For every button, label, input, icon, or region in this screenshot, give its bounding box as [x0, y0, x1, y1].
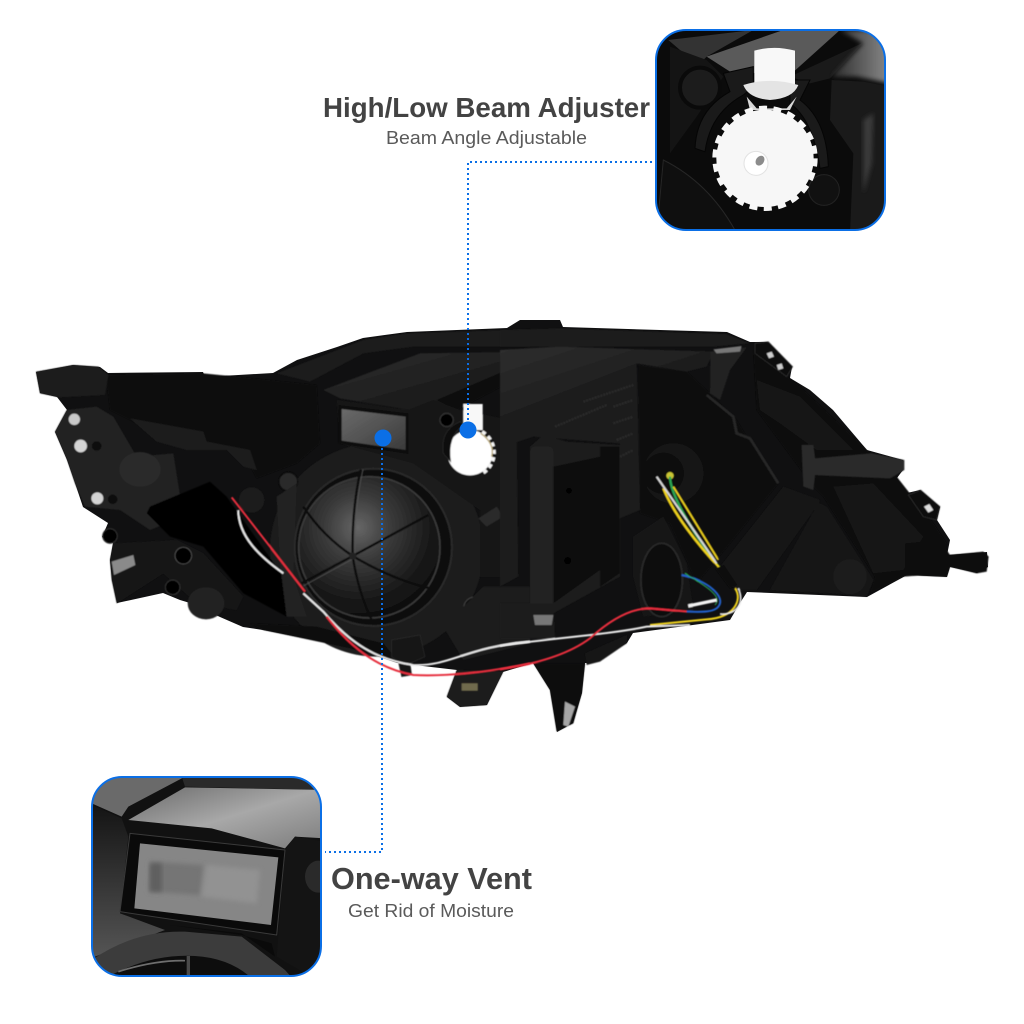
ridge [707, 395, 778, 483]
vent window [338, 405, 408, 454]
lower plug [188, 587, 224, 619]
clip arms [695, 67, 828, 168]
lens interior [833, 483, 923, 573]
tab 1 [755, 342, 793, 377]
round port [680, 68, 720, 108]
vent inner shade [161, 862, 202, 895]
label panel [500, 363, 640, 518]
vent frame [120, 833, 285, 935]
collar [743, 81, 798, 100]
wire sleeve [715, 565, 737, 588]
lower right housing [443, 587, 530, 660]
connector block [530, 435, 620, 613]
heading: beam adjuster: High/Low Beam Adjuster [323, 92, 650, 123]
screw 1 [69, 414, 80, 425]
round boss [833, 559, 867, 594]
post near bowl [279, 472, 298, 491]
top housing surface [323, 352, 530, 410]
upper wires [657, 477, 720, 568]
round plug [119, 452, 161, 487]
left bracket [55, 407, 183, 530]
vent housing block [337, 400, 510, 577]
top clip [710, 347, 747, 400]
vent inner light [203, 867, 258, 902]
panel: adjuster close-up [655, 29, 886, 231]
lamp housing silhouette [36, 320, 988, 732]
wire connector [392, 635, 425, 677]
ring hole c [103, 529, 117, 543]
right post [478, 507, 503, 527]
bowl inner [114, 956, 248, 975]
bowl rim [96, 932, 290, 975]
connector line: vent [325, 438, 382, 852]
vent glass [134, 843, 278, 925]
right wall [293, 836, 297, 839]
subheading: beam adjuster: Beam Angle Adjustable [386, 128, 587, 148]
upper left surface [92, 777, 185, 817]
top dark strip [182, 778, 314, 790]
upper arm [106, 373, 320, 478]
clip label [713, 346, 742, 353]
white wire long [500, 625, 690, 646]
bowl spoke [186, 956, 190, 975]
adjuster clip arms [443, 422, 463, 462]
tab 2 hole [924, 504, 933, 513]
connector pins [462, 683, 478, 691]
inner wall [757, 380, 853, 450]
panel: vent close-up [91, 776, 322, 977]
molded label text [555, 385, 633, 457]
headlight photo [36, 320, 989, 732]
top band [707, 30, 840, 75]
red wire long [500, 608, 687, 669]
lower bracket [110, 540, 243, 610]
subheading: vent: Get Rid of Moisture [348, 901, 514, 921]
bowl cover [295, 469, 452, 626]
rear connector [447, 670, 503, 707]
right tab [905, 540, 989, 577]
mount tab [36, 365, 108, 397]
left half details [36, 329, 530, 707]
upper right surface [832, 30, 890, 83]
lower strut [170, 925, 275, 957]
lower connector [585, 635, 627, 665]
gear [715, 108, 815, 208]
right box [830, 80, 884, 229]
white wire [238, 510, 530, 665]
panel border [656, 30, 885, 230]
panel backdrop [657, 31, 884, 229]
rib on top surface [437, 360, 530, 410]
black screw b [108, 495, 117, 504]
right highlight [863, 113, 873, 193]
adjuster gear [447, 404, 494, 475]
adjuster hole [440, 413, 453, 427]
foot clip [533, 615, 553, 625]
bulb socket upper [643, 443, 703, 503]
lower mount [533, 663, 585, 732]
rear wall [638, 365, 778, 583]
lower housing curve [657, 160, 737, 233]
dark smudge [150, 863, 162, 892]
silver clip [112, 555, 135, 575]
facet middle [720, 487, 820, 590]
top rim [277, 329, 530, 382]
stem [754, 48, 795, 85]
facet lower [770, 487, 873, 597]
connector line: beam adjuster [468, 162, 655, 430]
ring hole b [165, 580, 180, 595]
grey strut [802, 445, 904, 490]
panel border [92, 777, 321, 976]
lower right disc [809, 175, 839, 205]
bottom foot [500, 603, 555, 638]
ring hole a [175, 547, 192, 564]
post at hole [239, 487, 264, 513]
pillar left of bowl [277, 483, 307, 617]
top surface [128, 787, 325, 848]
marker dot: beam adjuster [460, 422, 476, 438]
gear teeth upper [747, 97, 797, 110]
top surface right [500, 347, 713, 417]
screw 2 [74, 440, 87, 452]
red wire [232, 497, 530, 675]
bowl highlight [118, 961, 185, 972]
dark cavity [147, 482, 287, 617]
left column [500, 420, 518, 587]
right port [305, 860, 320, 892]
heading: vent: One-way Vent [331, 861, 532, 896]
silver screw [563, 702, 575, 727]
right open side [753, 350, 947, 593]
panel backdrop [93, 778, 320, 975]
marker dot: vent [374, 430, 392, 446]
upper left surface [668, 31, 752, 59]
lower right hole [464, 597, 486, 620]
bulb socket lower [633, 517, 693, 617]
right half details [500, 328, 989, 732]
black screw a [92, 441, 101, 451]
looped wires [650, 573, 741, 625]
sloped facet [640, 367, 733, 418]
ridge strip [795, 44, 861, 84]
screw 3 [91, 492, 103, 504]
left wall [93, 817, 165, 956]
left wall [670, 47, 723, 153]
arm lower rib [130, 418, 257, 470]
tab 2 [908, 490, 940, 520]
lower housing edge [250, 623, 400, 663]
top rim right [500, 328, 750, 347]
tab 1 hole [767, 352, 783, 370]
body around the bowl [270, 443, 483, 657]
